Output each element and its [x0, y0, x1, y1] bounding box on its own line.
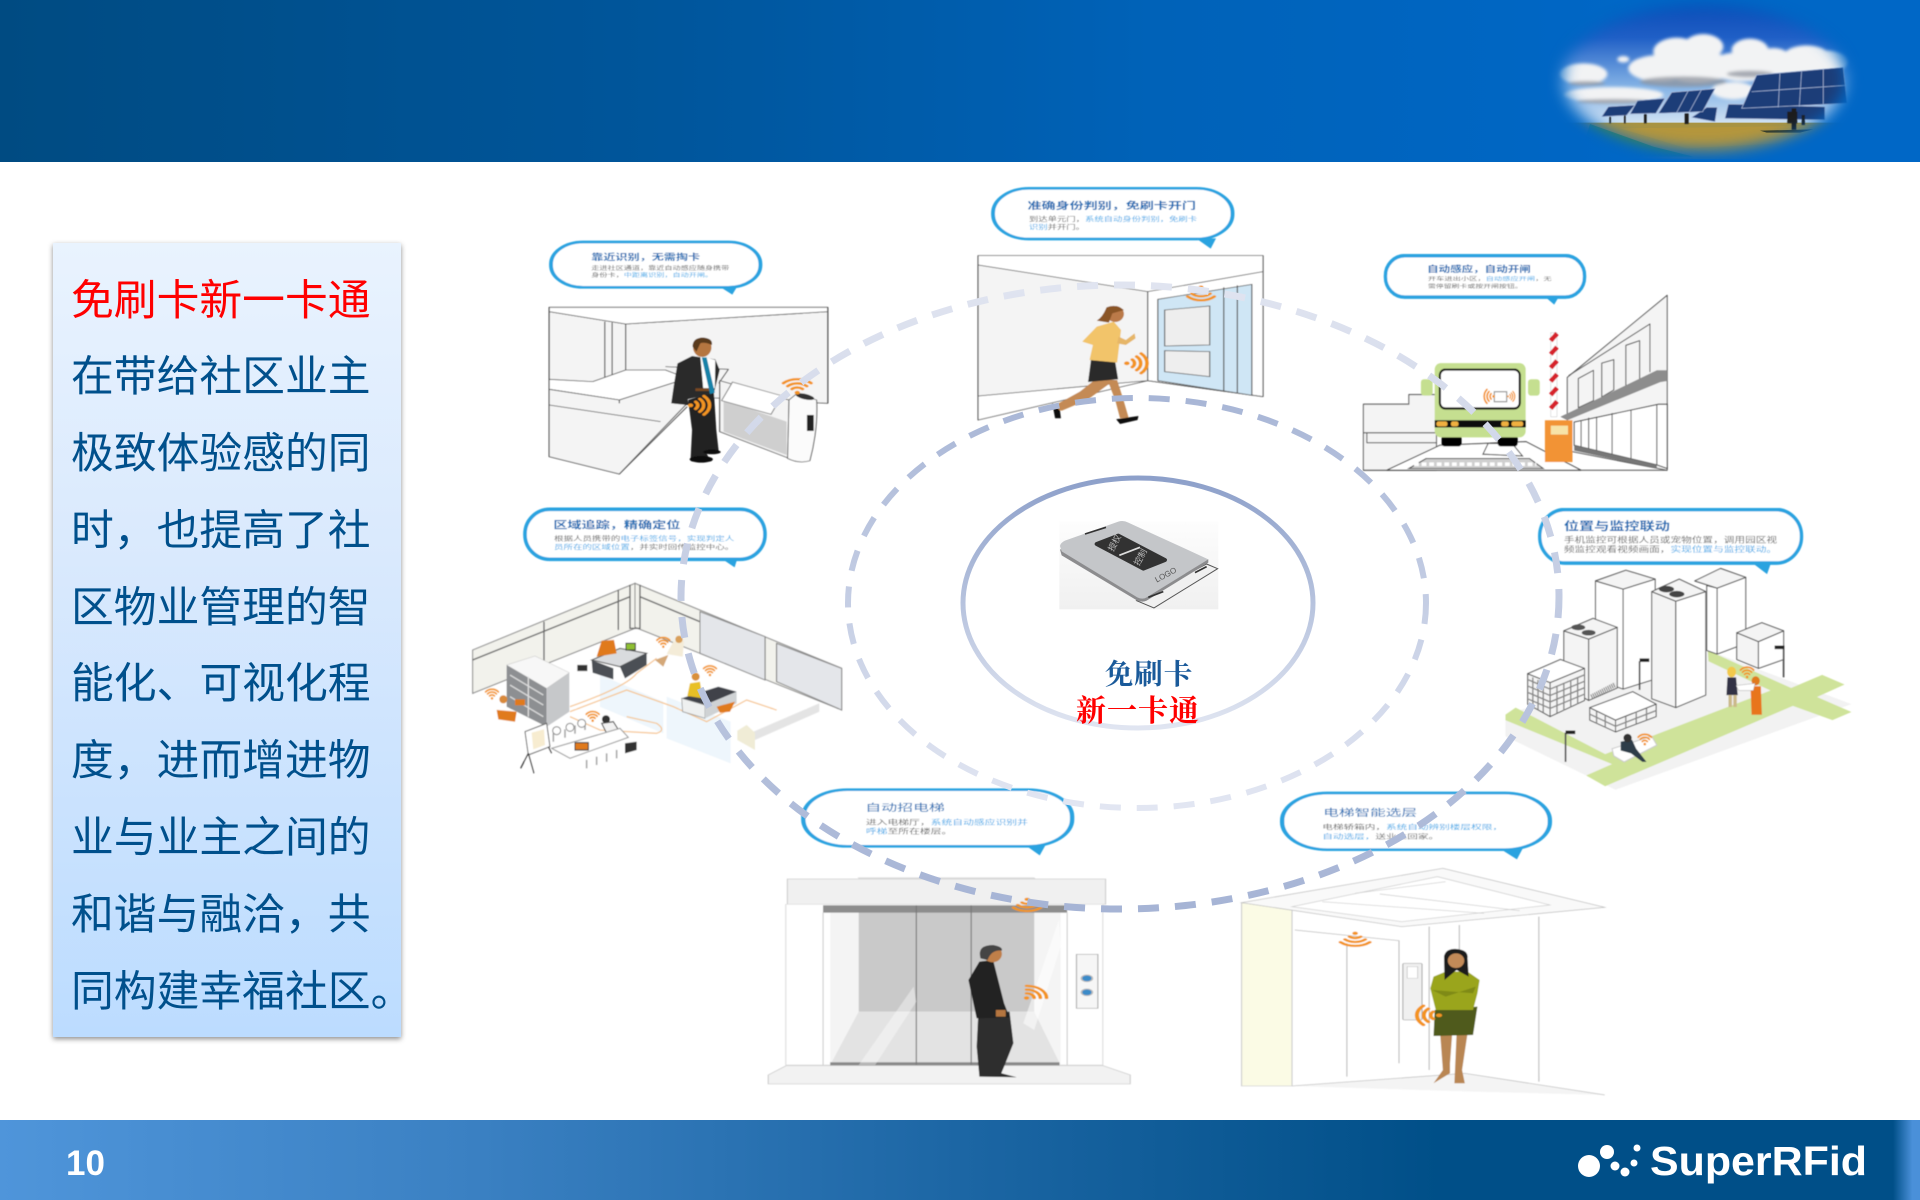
label: 新一卡通: 新一卡通 — [1076, 686, 1200, 730]
callout: 自动招电梯 — [803, 790, 1072, 855]
whiteboard — [521, 723, 552, 773]
panel: description text: 和谐与融洽，共 — [71, 891, 371, 939]
callout: 区域追踪: 根据人员携带的电子标签信号，实现判定人 — [554, 534, 734, 542]
callout: 位置与监控联动: 位置与监控联动 — [1564, 519, 1670, 532]
icon: wifi at turnstile — [783, 379, 811, 395]
icon: wifi on cabin wall — [1340, 932, 1370, 946]
street buildings — [1363, 295, 1667, 470]
scenes group — [473, 188, 1851, 1095]
scene: auto-call elevator — [768, 790, 1130, 1084]
elevator lobby — [768, 877, 1130, 1084]
panel: description text — [53, 243, 401, 1037]
woman in green — [1430, 949, 1480, 1083]
scene: proximity recognition at turnstile — [549, 242, 828, 474]
man in suit — [671, 338, 721, 463]
office walls and floor — [473, 583, 842, 773]
callout: 自动感应 — [1385, 256, 1585, 305]
callout: 区域追踪 — [525, 509, 765, 567]
pipe rail — [737, 703, 819, 750]
callout: 准确身份判别: 到达单元门，系统自动身份判别，免刷卡 — [1029, 215, 1197, 223]
green bus — [1421, 363, 1540, 446]
card device: 授权 — [1105, 532, 1123, 553]
card device: LOGO — [1154, 566, 1178, 584]
icon: wifi above elevator door — [1013, 898, 1041, 911]
page number: 10 — [66, 1144, 105, 1183]
icon: wifi office 3 — [704, 666, 716, 676]
callout: 自动招电梯: 进入电梯厅，系统自动感应识别并 — [866, 818, 1028, 826]
icon: wifi right of card — [1507, 391, 1515, 401]
callout: 自动感应: 自动感应，自动开闸 — [1427, 263, 1531, 274]
main diagram — [472, 2, 1864, 1184]
panel: description text: 区物业管理的智 — [71, 584, 371, 632]
panel: description text: 业与业主之间的 — [71, 814, 371, 862]
footer logo: SuperRFid: SuperRFid — [1650, 1138, 1867, 1184]
center badge — [963, 478, 1313, 730]
scene: area tracking office — [473, 509, 842, 773]
callout: 区域追踪: 区域追踪，精确定位 — [553, 519, 680, 531]
desks and people — [497, 636, 737, 768]
barrier gate — [1545, 333, 1572, 462]
room and door — [978, 256, 1263, 420]
server rack — [507, 656, 569, 727]
icon: wifi office 2 — [657, 638, 670, 648]
panel: description text: 时，也提高了社 — [71, 507, 371, 555]
callout: 电梯智能选层: 电梯轿箱内，系统自动辨别楼层权限， — [1322, 822, 1503, 830]
people on the street — [1612, 667, 1762, 762]
scene: smart floor selection elevator — [1242, 793, 1605, 1095]
callout: 位置与监控联动: 手机监控可根据人员或宠物位置，调用园区视 — [1564, 535, 1777, 544]
icon: wifi at woman's pocket — [1417, 1006, 1442, 1025]
icon: wifi office 4 — [586, 712, 599, 722]
solid ring — [963, 478, 1313, 728]
card device — [1059, 521, 1218, 609]
callout: 位置与监控联动 — [1540, 510, 1801, 574]
callout: 自动感应: 需停留刷卡或按开闸按钮。 — [1428, 282, 1523, 289]
panel: description text: 极致体验感的同 — [71, 430, 371, 478]
man at elevator — [968, 945, 1017, 1077]
callout: 自动招电梯: 呼梯至所在楼层。 — [866, 827, 952, 835]
scene: vehicle barrier — [1363, 256, 1667, 470]
icon: wifi above door — [1188, 286, 1214, 300]
network cables — [570, 658, 777, 733]
dashed ring: inner — [848, 398, 1426, 808]
callout: 电梯智能选层 — [1282, 793, 1550, 859]
city block ground — [1505, 651, 1851, 790]
callout: 自动感应: 开车进出小区，自动感应开闸，无 — [1428, 275, 1552, 282]
towers — [1528, 568, 1784, 762]
icon: wifi beside man — [1015, 983, 1051, 1005]
lobby room drawing — [549, 307, 828, 474]
callout: 靠近识别: 走进社区通道，靠近自动感应随身携带 — [591, 264, 729, 272]
dashed ring: outer — [681, 285, 1559, 909]
panel: description text: 免刷卡新一卡通 — [71, 276, 371, 324]
callout: 位置与监控联动: 频监控观看视频画面，实现位置与监控联动。 — [1564, 545, 1777, 554]
icon: wifi at woman's pocket — [1124, 354, 1147, 373]
callout: 区域追踪: 员所在的区域位置，并实时回传监控中心。 — [554, 543, 734, 551]
card device: 控制 — [1131, 546, 1149, 567]
callout: 准确身份判别: 准确身份判别，免刷卡开门 — [1027, 199, 1196, 211]
callout: 准确身份判别: 识别并开门。 — [1029, 223, 1085, 231]
label: 免刷卡: 免刷卡 — [1105, 652, 1193, 693]
solar panel photo — [1547, 0, 1863, 159]
callout: 电梯智能选层: 自动选层，送业主回家。 — [1322, 832, 1439, 840]
scene: position and monitoring — [1505, 510, 1851, 790]
callout: 靠近识别 — [551, 242, 760, 295]
scene: door identity recognition — [978, 188, 1263, 424]
icon: wifi between people — [1740, 667, 1754, 678]
icon: wifi at man's pocket — [688, 396, 710, 415]
icon: wifi left of card — [1484, 389, 1495, 403]
header band — [0, 0, 1920, 162]
icon: wifi office 1 — [486, 689, 498, 700]
icon: wifi near bench — [1638, 734, 1651, 745]
footer band — [0, 1120, 1920, 1200]
woman walking — [1052, 306, 1138, 424]
panel: description text: 度，进而增进物 — [71, 737, 371, 785]
panel: description text: 同构建幸福社区。 — [71, 968, 413, 1016]
elevator cabin — [1242, 868, 1605, 1095]
callout: 电梯智能选层: 电梯智能选层 — [1323, 807, 1417, 818]
callout: 靠近识别: 身份卡，中距离识别，自动开闸。 — [591, 271, 713, 279]
callout: 靠近识别: 靠近识别，无需掏卡 — [591, 252, 700, 262]
callout: 准确身份判别 — [993, 188, 1233, 249]
callout: 自动招电梯: 自动招电梯 — [865, 802, 945, 813]
panel: description text: 能化、可视化程 — [71, 660, 371, 708]
panel: description text: 在带给社区业主 — [71, 353, 371, 401]
